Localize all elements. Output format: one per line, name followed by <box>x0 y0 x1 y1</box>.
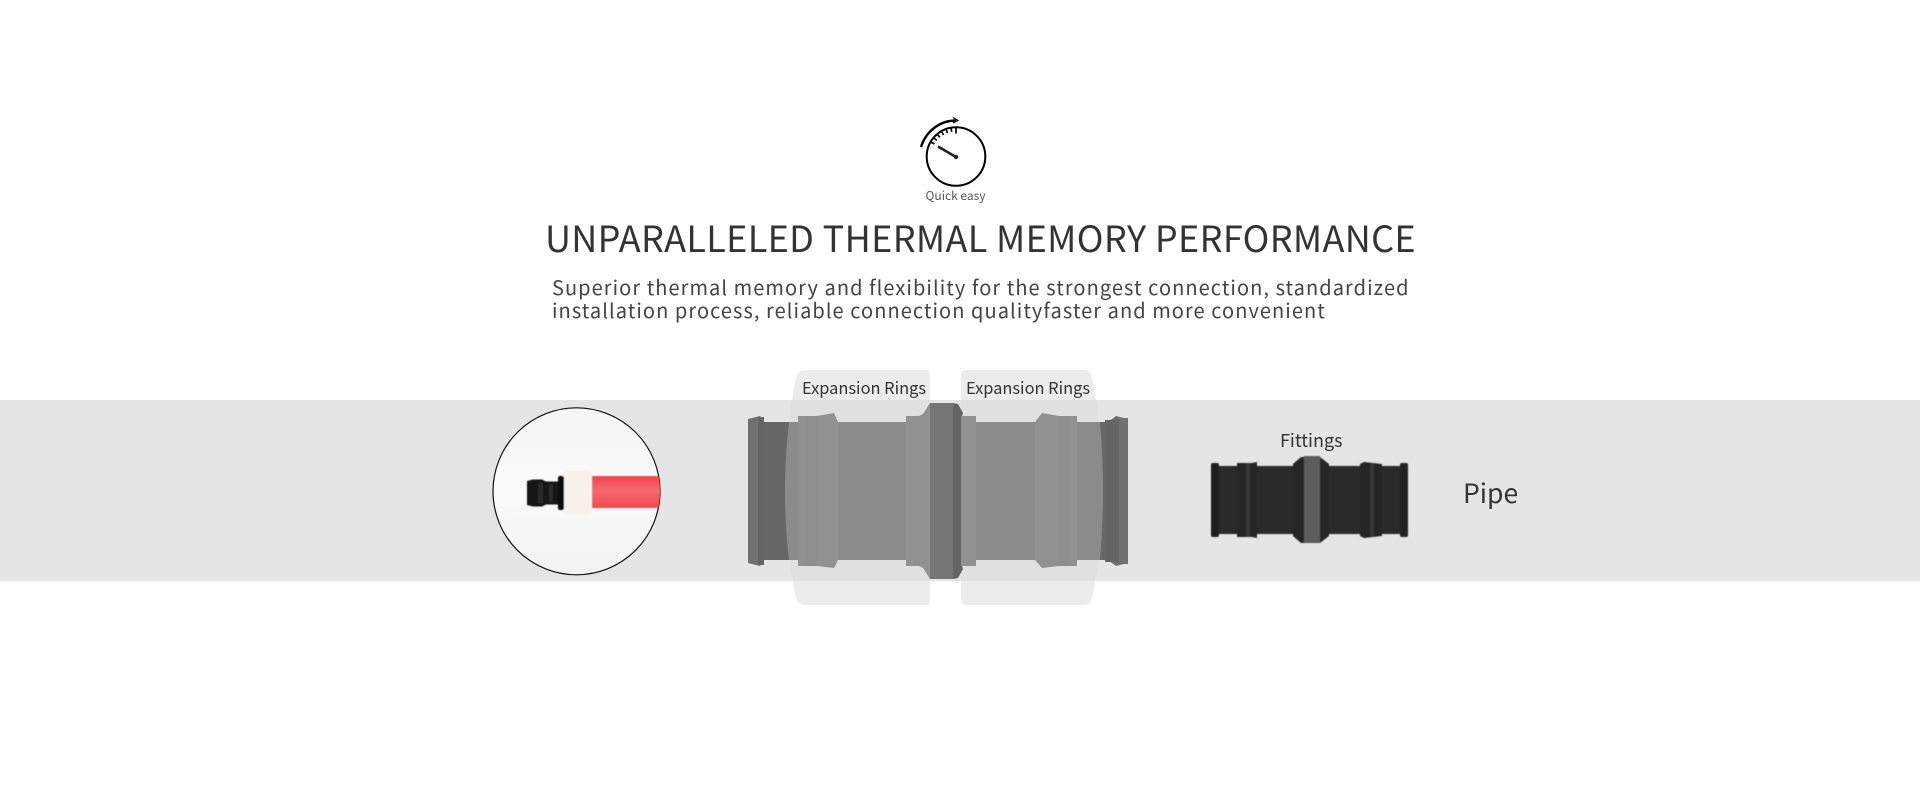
title: UNPARALLELED THERMAL MEMORY PERFORMANCE <box>545 211 1416 263</box>
description text: installation process, reliable connection qualityfaster and more convenient <box>552 295 1326 324</box>
expansion ring highlight: left <box>785 370 930 605</box>
inset photo: pipe connection <box>493 408 662 575</box>
label: expansion rings right: Expansion Rings <box>966 375 1090 399</box>
icon caption: Quick easy <box>926 187 986 204</box>
large grey fitting <box>748 403 1128 579</box>
label: expansion rings left: Expansion Rings <box>802 375 926 399</box>
description text: Superior thermal memory and flexibility for the strongest connection, standardized <box>552 272 1410 301</box>
label: fittings: Fittings <box>1280 427 1343 453</box>
label: pipe: Pipe <box>1463 472 1518 511</box>
small black fitting <box>1211 456 1408 543</box>
icon: quick easy gauge <box>921 118 985 186</box>
diagram artwork <box>492 117 1409 605</box>
grey band <box>0 400 1920 581</box>
expansion ring highlight: right <box>961 370 1103 605</box>
description text <box>552 272 1410 324</box>
